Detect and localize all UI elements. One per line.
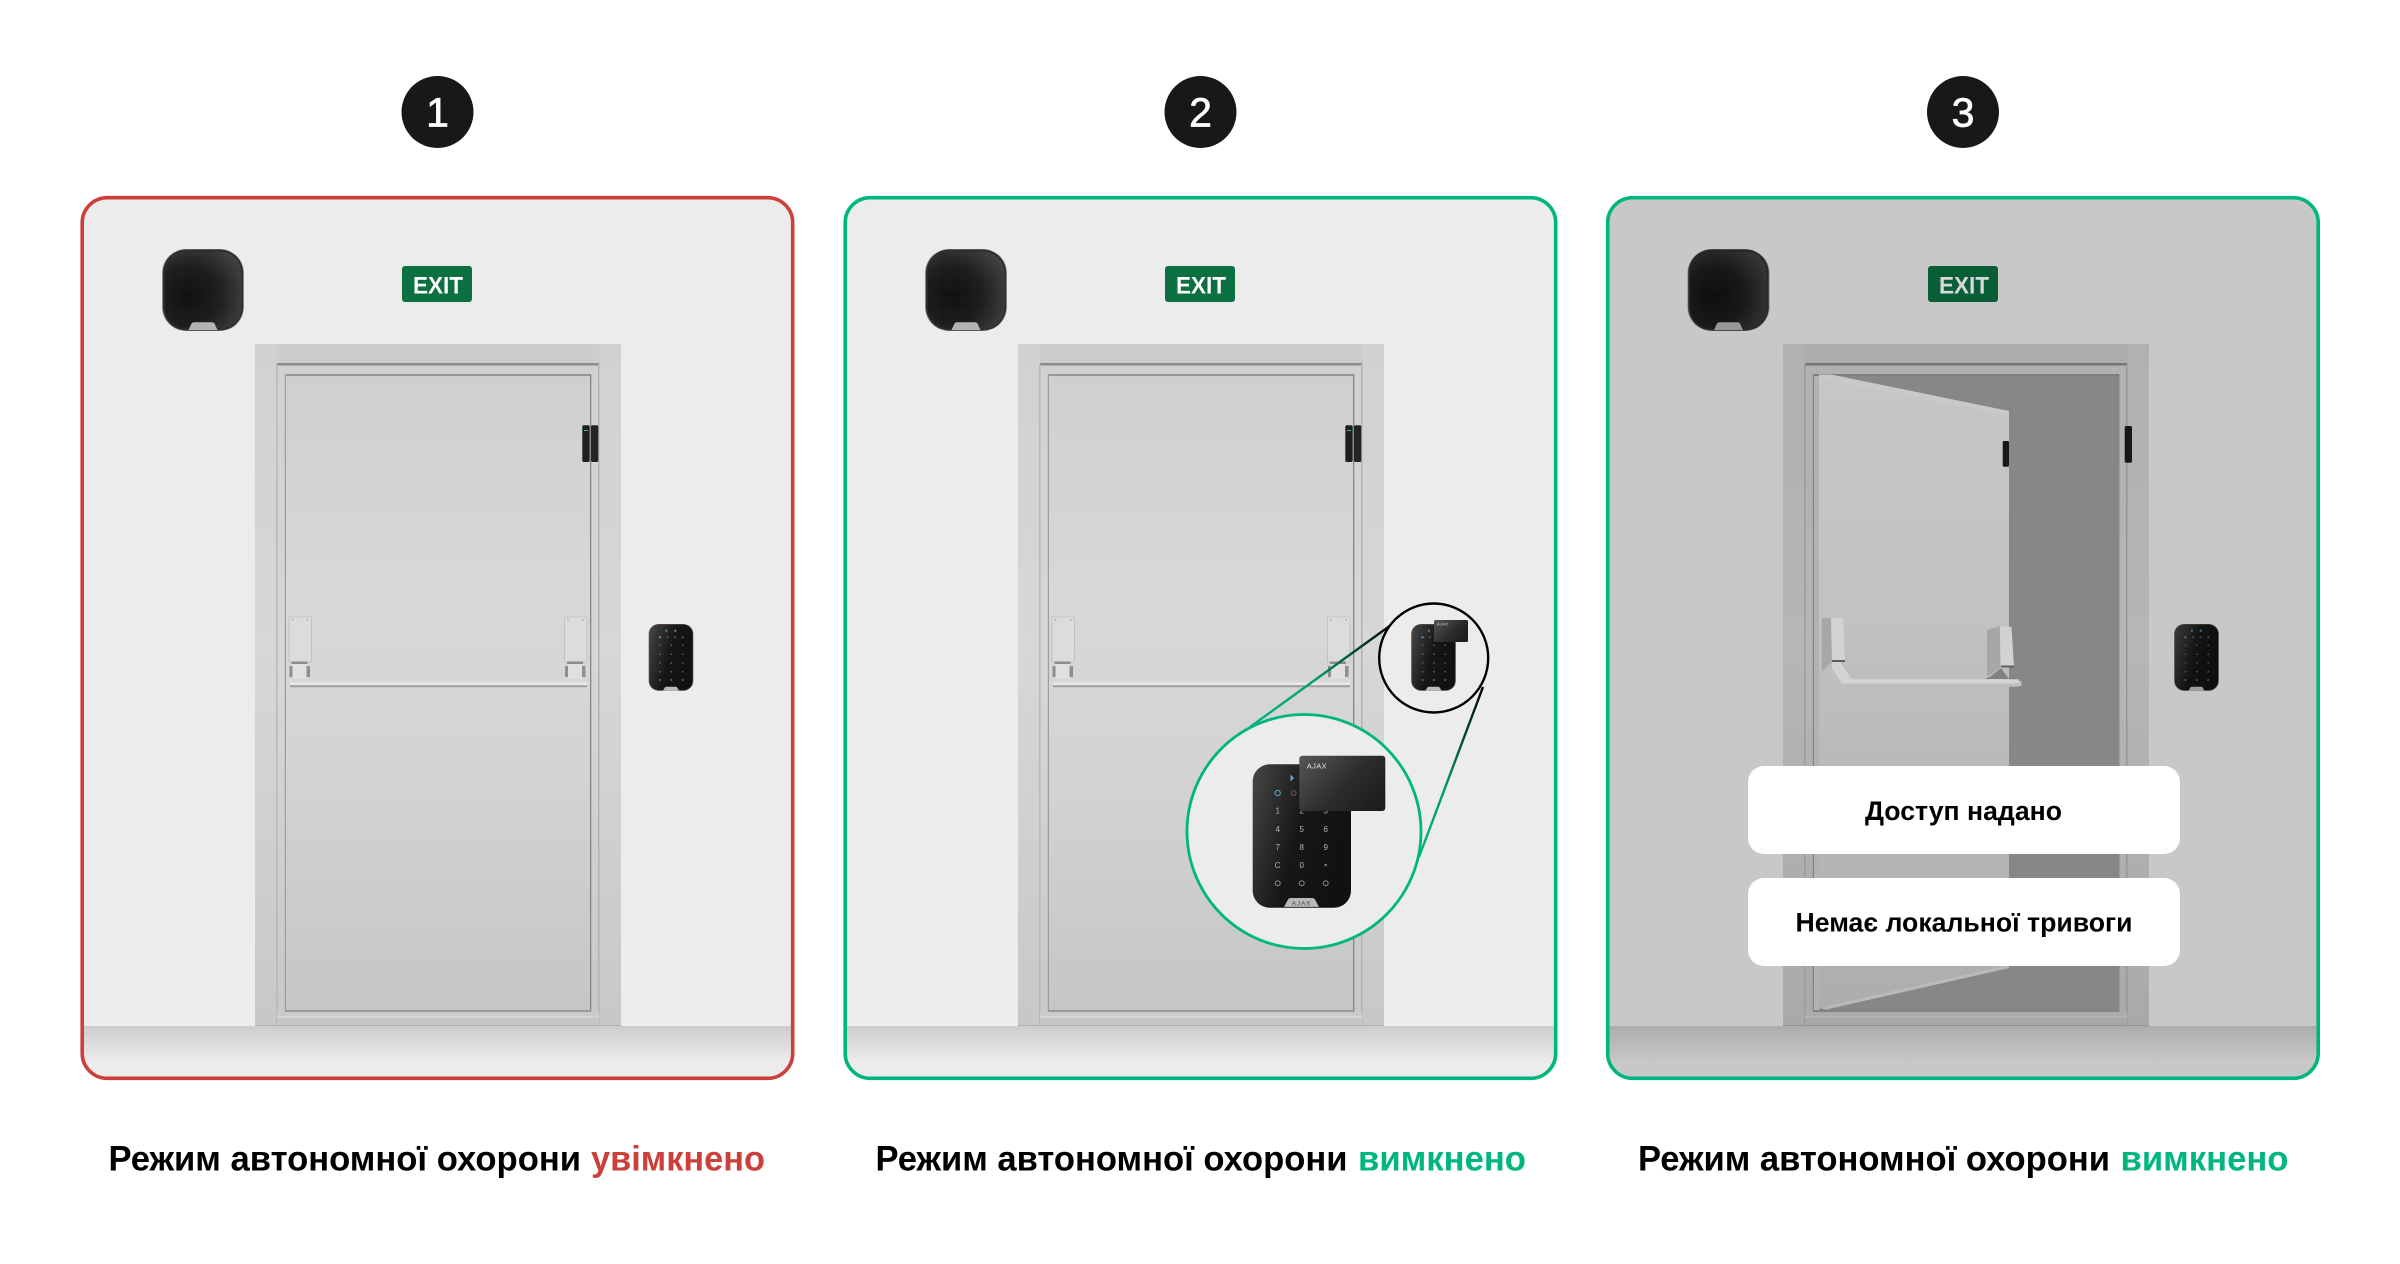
panel: autonomous mode on [82, 198, 793, 1078]
keypad magnified: 7 [1275, 843, 1280, 852]
step number 1: 1 [426, 90, 449, 136]
step number 1 [402, 76, 474, 148]
panel: door opened, access granted: EXIT [1939, 272, 1989, 299]
keypad magnified: 6 [1323, 825, 1328, 834]
icon: keypad [649, 624, 693, 691]
panel: door opened, access granted [1608, 198, 2318, 1078]
exit sign: EXIT [413, 272, 463, 299]
keypad magnified: 1 [1275, 806, 1280, 816]
keypad magnified: 2 [1299, 806, 1304, 816]
caption 3: Режим автономної охорони [1638, 1140, 2110, 1178]
pass card: AJAX [1307, 762, 1327, 770]
keypad magnified: 4 [1275, 825, 1280, 834]
step number 3: 3 [1952, 90, 1974, 136]
panic bar [289, 617, 587, 687]
large callout: keypad with pass card [1187, 714, 1421, 948]
caption 1: увімкнено [591, 1140, 765, 1178]
keypad magnified: * [1324, 862, 1327, 872]
door frame [255, 344, 621, 1026]
status card: access granted [1748, 766, 2180, 854]
status card: access granted: Доступ надано [1865, 796, 2062, 826]
keypad magnified: 3 [1323, 806, 1328, 816]
small callout: keypad with card [1379, 604, 1488, 712]
keypad magnified: 8 [1299, 843, 1304, 852]
pass card [1299, 756, 1385, 811]
step number 2 [1164, 76, 1236, 148]
keypad magnified: AJAX [1292, 900, 1311, 908]
caption 1: Режим автономної охорони [108, 1140, 581, 1178]
keypad magnified: 0 [1299, 861, 1304, 870]
panel: autonomous mode off with pass card: EXIT [1176, 272, 1226, 299]
keypad magnified [1253, 764, 1351, 908]
door sensor [582, 425, 598, 462]
caption 2: вимкнено [1358, 1140, 1526, 1178]
panel border [82, 198, 793, 1078]
caption 2: Режим автономної охорони [876, 1140, 1348, 1178]
closed door leaf [286, 376, 590, 1010]
keypad magnified: 9 [1323, 843, 1328, 852]
status card: no local alarm [1748, 878, 2180, 966]
step number 3 [1927, 76, 1999, 148]
icon: siren [162, 249, 244, 331]
callout connector lines [1250, 625, 1483, 857]
step number 2: 2 [1189, 90, 1212, 136]
exit sign [402, 266, 472, 302]
panel: autonomous mode off with pass card [845, 198, 1556, 1078]
caption 3: вимкнено [2120, 1140, 2288, 1178]
keypad magnified: C [1275, 861, 1281, 870]
status card: no local alarm: Немає локальної тривоги [1796, 908, 2132, 938]
keypad magnified: 5 [1299, 825, 1304, 834]
small callout: keypad with card: AJAX [1437, 622, 1449, 626]
